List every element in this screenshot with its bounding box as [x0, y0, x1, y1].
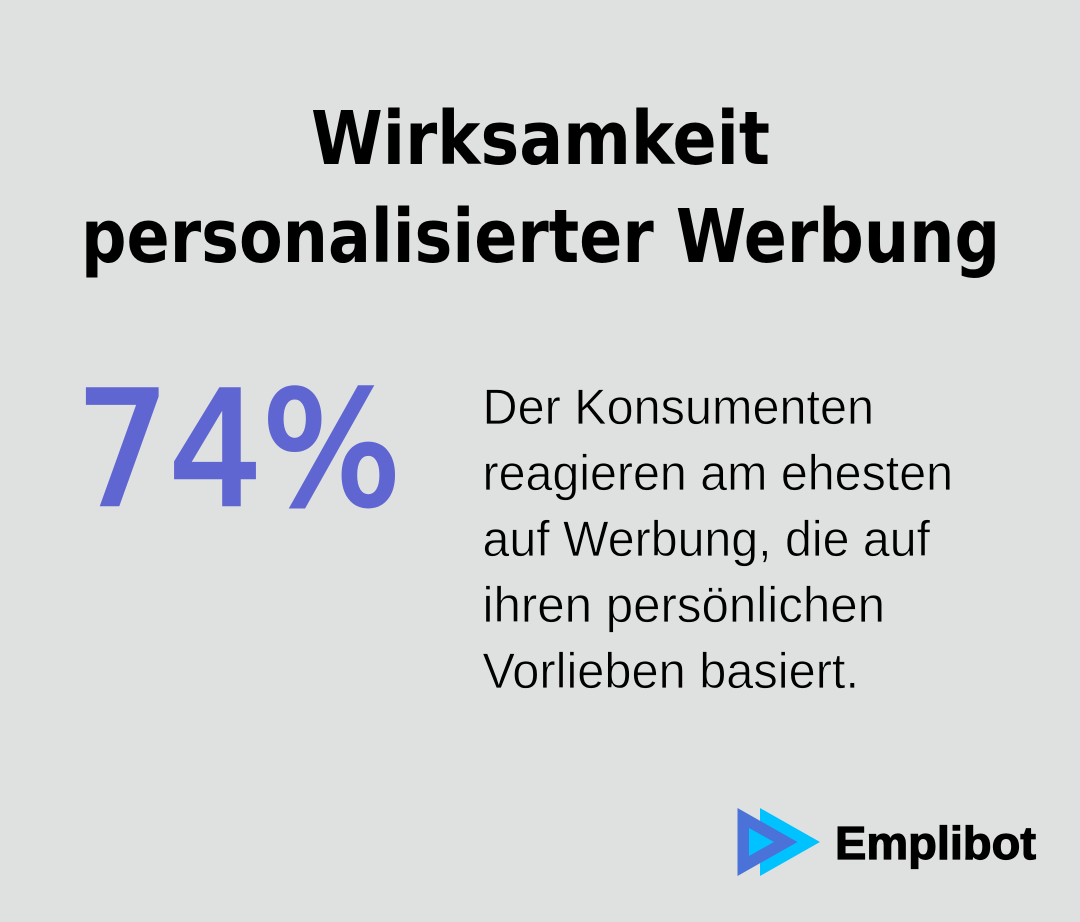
description text: Der Konsumenten — [482, 379, 874, 435]
logo wordmark: Emplibot — [835, 817, 1036, 869]
description text: reagieren am ehesten — [482, 445, 953, 501]
icon: play triangles — [738, 808, 820, 876]
description text: auf Werbung, die auf — [482, 511, 930, 567]
logo: Emplibot — [738, 808, 1036, 876]
description text: Vorlieben basiert. — [482, 643, 859, 699]
title: Wirksamkeit — [311, 96, 770, 182]
title — [81, 96, 1000, 280]
description text — [482, 379, 953, 699]
statistic: 74%: 74% — [76, 359, 401, 542]
description text: ihren persönlichen — [482, 577, 885, 633]
